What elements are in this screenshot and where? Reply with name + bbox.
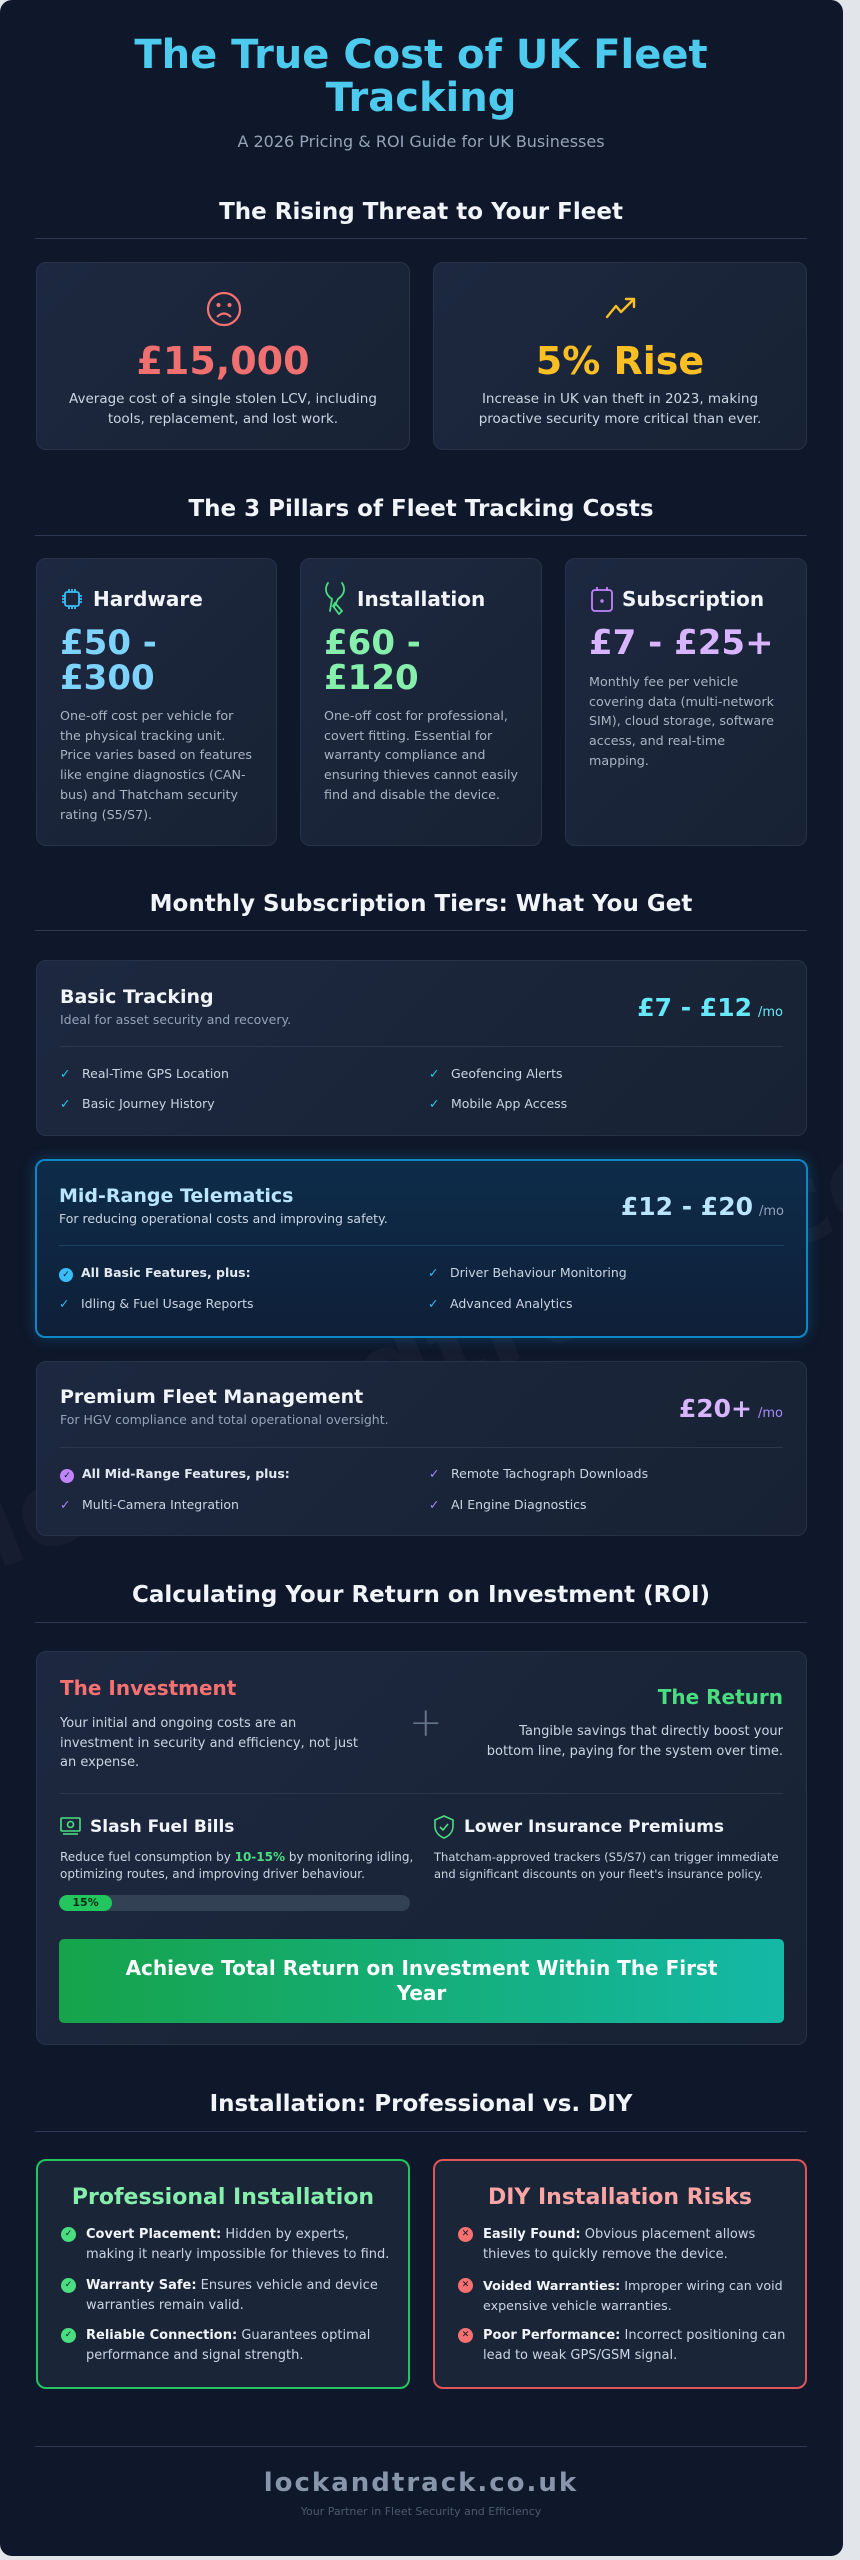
panel: basic tracking tier: Mobile App Access: [451, 1096, 567, 1111]
icon: sad face: [206, 292, 242, 326]
tier title: Premium Fleet Management: [60, 1386, 363, 1408]
panel: premium tier: ✓: [60, 1497, 70, 1512]
panel: premium tier: ✓: [429, 1497, 439, 1512]
title: Installation: [357, 587, 485, 611]
panel: mid-range tier: Advanced Analytics: [450, 1296, 572, 1311]
return: [487, 1685, 783, 1758]
investment: The Investment: [60, 1676, 236, 1700]
price: £120: [324, 658, 419, 698]
panel: premium tier: Remote Tachograph Downloads: [451, 1466, 648, 1481]
heading: rising threat: The Rising Threat to Your Fleet: [219, 199, 623, 225]
panel: professional installation: Warranty Safe: Ensures vehicle and device warranties remain valid.: [86, 2278, 378, 2312]
title: Subscription: [622, 587, 764, 611]
panel: ROI: [36, 1651, 807, 2045]
panel: mid-range tier: ✓: [428, 1265, 438, 1280]
tier price: £20+ /mo: [679, 1394, 783, 1423]
features: Real-Time GPS Location: [82, 1066, 229, 1081]
description: One-off cost per vehicle for the physical tracking unit. Price varies based on features like engine diagnostics (CAN-bus) and Thatcham security rating (S5/S7).: [60, 708, 252, 822]
icon: trend up: [606, 298, 636, 318]
panel: basic tracking tier: ✓: [429, 1066, 439, 1081]
stat: 5% Rise: [536, 339, 704, 383]
icon: cash: [60, 1817, 81, 1835]
tier title: Mid-Range Telematics: [59, 1185, 294, 1207]
return: The Return: [658, 1685, 783, 1709]
price: £300: [60, 658, 155, 698]
benefit: fuel: Reduce fuel consumption by 10-15% by monitoring idling, optimizing routes, and improving driver behaviour.: [60, 1850, 413, 1881]
title: Hardware: [93, 587, 203, 611]
benefit: fuel: [60, 1817, 413, 1881]
list: ✕: [462, 2229, 469, 2239]
panel: mid-range tier: [35, 1159, 808, 1338]
icon: shield: [434, 1815, 454, 1839]
subtitle: A 2026 Pricing & ROI Guide for UK Businesses: [237, 132, 605, 151]
progress bar: [59, 1895, 410, 1911]
description: One-off cost for professional, covert fitting. Essential for warranty compliance and ensuring thieves cannot easily find and disable the device.: [324, 708, 518, 802]
description: Monthly fee per vehicle covering data (multi-network SIM), cloud storage, software access, and real-time mapping.: [589, 674, 774, 768]
heading: ROI: Calculating Your Return on Investment (ROI): [132, 1582, 710, 1608]
panel: DIY risks: [433, 2159, 807, 2389]
panel: DIY risks: ✕: [462, 2280, 469, 2290]
panel: premium tier: AI Engine Diagnostics: [451, 1497, 587, 1512]
icon: tools: [325, 582, 345, 615]
panel: premium tier: Multi-Camera Integration: [82, 1497, 239, 1512]
panel: premium tier: ✓: [429, 1466, 439, 1481]
panel: basic tracking tier: Ideal for asset security and recovery.: [60, 1012, 291, 1027]
progress bar: 15%: [72, 1896, 99, 1909]
description: Average cost of a single stolen LCV, including tools, replacement, and lost work.: [69, 391, 377, 427]
icon: sim/device: [591, 587, 613, 612]
description: Increase in UK van theft in 2023, making proactive security more critical than ever.: [479, 391, 761, 427]
panel: professional installation: Covert Placement: Hidden by experts, making it nearly impossible for thieves to find.: [86, 2227, 389, 2262]
panel: DIY risks: Poor Performance: Incorrect positioning can lead to weak GPS/GSM signal.: [483, 2328, 785, 2362]
panel: basic tracking tier: ✓: [429, 1096, 439, 1111]
footer tagline: Your Partner in Fleet Security and Efficiency: [301, 2505, 541, 2518]
investment: Your initial and ongoing costs are an investment in security and efficiency, not just an expense.: [60, 1716, 358, 1770]
panel: mid-range tier: Driver Behaviour Monitoring: [450, 1265, 627, 1280]
tier price: £7 - £12 /mo: [637, 993, 783, 1022]
panel: basic tracking tier: Basic Journey History: [82, 1096, 215, 1111]
list: ✓: [65, 2229, 72, 2239]
features: ✓: [60, 1066, 70, 1081]
features: ✓: [63, 1471, 71, 1481]
panel: mid-range tier: For reducing operational costs and improving safety.: [59, 1211, 388, 1226]
price: £50 -: [60, 623, 157, 663]
benefit: fuel: Slash Fuel Bills: [90, 1817, 234, 1837]
list: [458, 2227, 473, 2242]
panel: subscription: [565, 558, 807, 846]
price: [324, 623, 421, 698]
panel: basic tracking tier: ✓: [60, 1096, 70, 1111]
title: The True Cost of UK Fleet Tracking: [134, 32, 708, 121]
panel: professional installation: ✓: [65, 2280, 72, 2290]
footer brand: lockandtrack.co.uk: [264, 2468, 578, 2498]
panel: premium tier: [36, 1361, 807, 1536]
benefit: insurance: [434, 1815, 779, 1881]
icon: chip: [62, 589, 82, 609]
price: £7 - £25+: [589, 623, 774, 663]
investment: [60, 1676, 358, 1770]
callout button: [59, 1939, 784, 2023]
features: All Basic Features, plus:: [81, 1265, 251, 1280]
panel: mid-range tier: ✓: [428, 1296, 438, 1311]
panel: professional installation: Reliable Connection: Guarantees optimal performance and signal strength.: [86, 2328, 370, 2362]
benefit: insurance: Thatcham-approved trackers (S5/S7) can trigger immediate and significant discounts on your fleet's insurance policy.: [434, 1850, 779, 1881]
panel: DIY risks: Easily Found: Obvious placement allows thieves to quickly remove the device.: [483, 2227, 755, 2262]
panel: basic tracking tier: Geofencing Alerts: [451, 1066, 562, 1081]
panel: DIY risks: ✕: [462, 2330, 469, 2340]
panel: hardware: [36, 558, 277, 846]
features: ✓: [62, 1270, 70, 1280]
tier price: £12 - £20 /mo: [621, 1192, 784, 1221]
panel: professional installation: ✓: [65, 2330, 72, 2340]
return: Tangible savings that directly boost your bottom line, paying for the system over time.: [487, 1724, 783, 1758]
panel: professional installation: [36, 2159, 410, 2389]
heading: subscription tiers: Monthly Subscription Tiers: What You Get: [150, 891, 692, 917]
panel: installation: [300, 558, 542, 846]
icon: plus: +: [409, 1700, 443, 1746]
price: £60 -: [324, 623, 421, 663]
panel: stolen LCV cost: [36, 262, 410, 450]
panel: van theft rise: [433, 262, 807, 450]
benefit: insurance: Lower Insurance Premiums: [464, 1817, 724, 1837]
list: [61, 2227, 76, 2242]
title: DIY Installation Risks: [488, 2185, 752, 2210]
panel: mid-range tier: ✓: [59, 1296, 69, 1311]
title: Professional Installation: [72, 2185, 374, 2210]
panel: mid-range tier: Idling & Fuel Usage Reports: [81, 1296, 254, 1311]
price: [60, 623, 157, 698]
stat: £15,000: [136, 339, 310, 383]
heading: 3 pillars: The 3 Pillars of Fleet Tracking Costs: [188, 496, 654, 522]
tier title: Basic Tracking: [60, 986, 214, 1008]
panel: DIY risks: Voided Warranties: Improper wiring can void expensive vehicle warranties.: [483, 2278, 783, 2312]
panel: premium tier: For HGV compliance and total operational oversight.: [60, 1412, 389, 1427]
features: All Mid-Range Features, plus:: [82, 1466, 290, 1481]
heading: installation: Installation: Professional vs. DIY: [210, 2091, 632, 2117]
callout button: Achieve Total Return on Investment Within The First Year: [126, 1956, 717, 2005]
panel: basic tracking tier: [36, 960, 807, 1136]
